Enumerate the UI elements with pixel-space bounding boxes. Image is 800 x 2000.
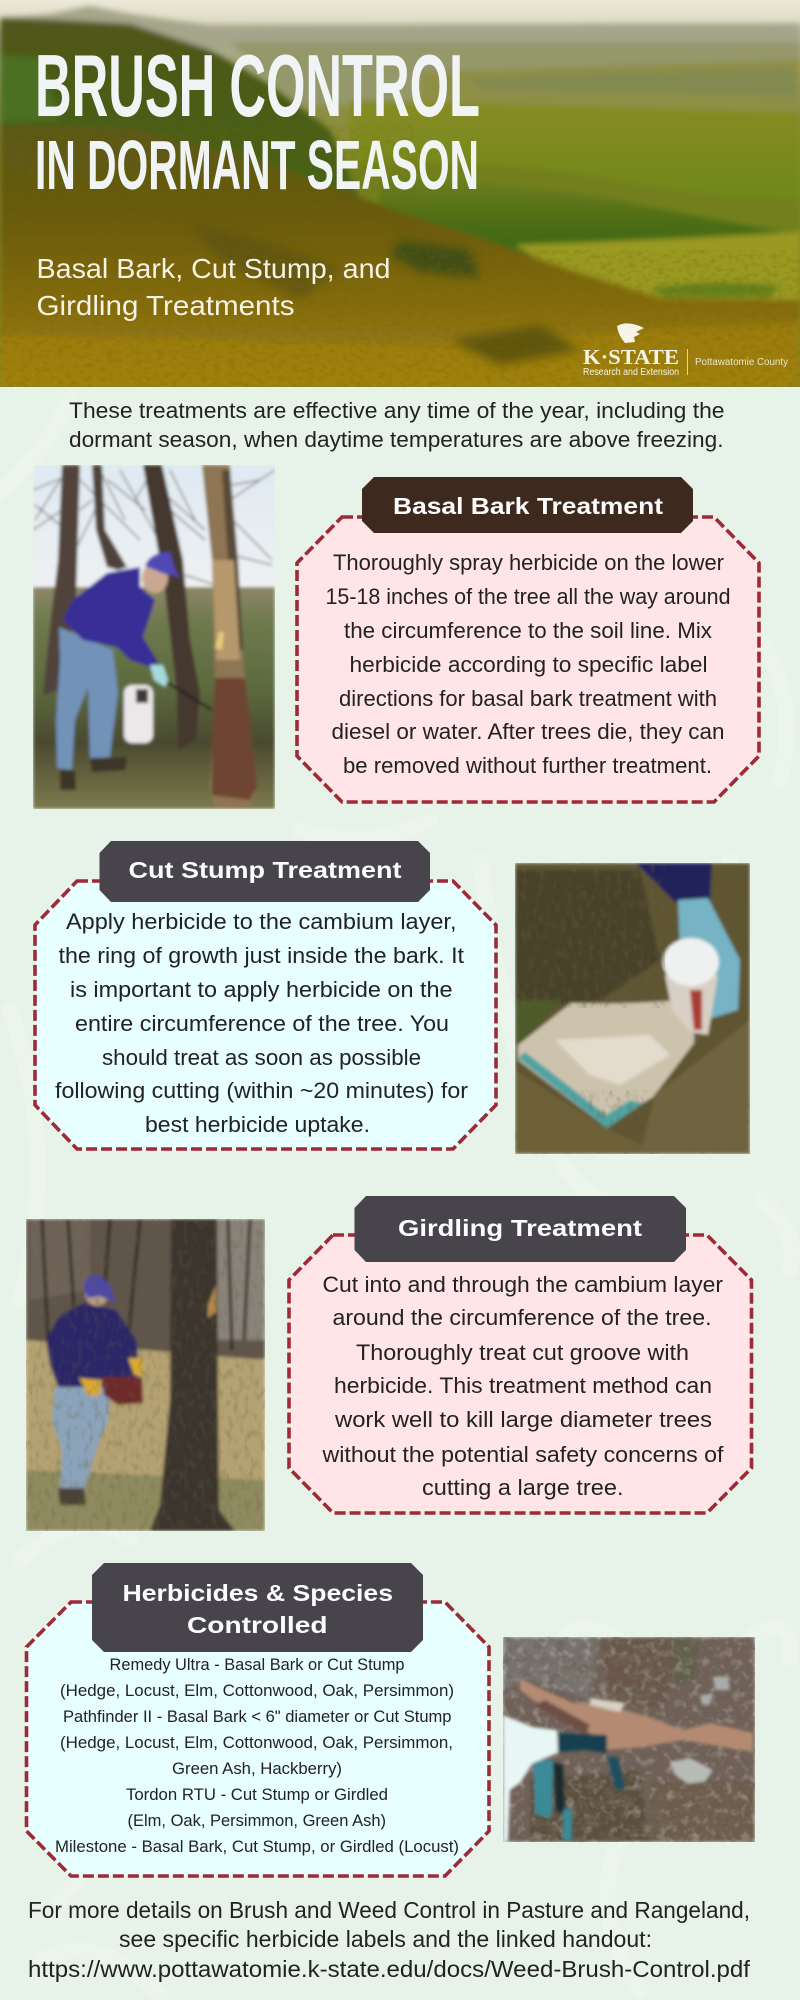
heading: cut stump: Cut Stump Treatment — [128, 857, 402, 883]
basal bark text: directions for basal bark treatment with — [339, 686, 717, 711]
herbicides text: (Elm, Oak, Persimmon, Green Ash) — [128, 1811, 386, 1830]
panel: herbicides and species — [26, 1563, 489, 1876]
herbicides text: Pathfinder II - Basal Bark < 6" diameter or Cut Stump — [63, 1707, 452, 1726]
intro text: dormant season, when daytime temperatures are above freezing. — [69, 427, 724, 452]
cut stump text: entire circumference of the tree. You — [75, 1011, 449, 1036]
heading: girdling — [354, 1196, 686, 1262]
panel: basal bark — [297, 477, 759, 802]
subtitle: Basal Bark, Cut Stump, and — [36, 253, 390, 284]
basal bark text: Thoroughly spray herbicide on the lower — [333, 550, 724, 575]
K-State logo — [583, 323, 788, 378]
K-State logo: Research and Extension — [583, 367, 679, 378]
footer text: For more details on Brush and Weed Control in Pasture and Rangeland, — [28, 1897, 750, 1923]
heading: cut stump — [100, 841, 430, 902]
photo: girdling with chainsaw — [26, 1219, 265, 1531]
photo: cut stump treatment — [515, 863, 750, 1154]
girdling text: work well to kill large diameter trees — [334, 1407, 712, 1432]
heading: herbicides and species: Controlled — [187, 1612, 328, 1638]
intro text — [69, 398, 724, 452]
cut stump text: should treat as soon as possible — [102, 1045, 421, 1070]
intro text: These treatments are effective any time of the year, including the — [69, 398, 724, 423]
footer text — [28, 1897, 751, 1982]
K-State logo: Pottawatomie County — [695, 357, 788, 368]
herbicides text — [55, 1655, 459, 1856]
icon: wildcat head — [617, 323, 644, 343]
photo: girdled bark with herbicide — [503, 1637, 755, 1842]
cut stump text — [55, 909, 468, 1137]
herbicides text: (Hedge, Locust, Elm, Cottonwood, Oak, Persimmon) — [60, 1681, 454, 1700]
photo: basal bark spraying — [33, 465, 275, 809]
cut stump text: best herbicide uptake. — [145, 1112, 370, 1137]
K-State logo: K·STATE — [583, 345, 679, 369]
title: BRUSH CONTROL — [35, 36, 480, 135]
basal bark text — [326, 550, 730, 778]
basal bark text: 15-18 inches of the tree all the way around — [326, 584, 730, 609]
herbicides text: Milestone - Basal Bark, Cut Stump, or Girdled (Locust) — [55, 1837, 459, 1856]
herbicides text: Tordon RTU - Cut Stump or Girdled — [126, 1785, 388, 1804]
girdling text: Cut into and through the cambium layer — [322, 1272, 723, 1297]
title: IN DORMANT SEASON — [35, 126, 479, 204]
panel: girdling — [289, 1196, 752, 1513]
heading: basal bark: Basal Bark Treatment — [393, 493, 663, 519]
basal bark text: diesel or water. After trees die, they can — [332, 719, 724, 744]
girdling text — [321, 1272, 724, 1500]
heading: herbicides and species: Herbicides & Species — [122, 1580, 393, 1606]
girdling text: cutting a large tree. — [422, 1475, 624, 1500]
cut stump text: is important to apply herbicide on the — [70, 977, 453, 1002]
girdling text: around the circumference of the tree. — [332, 1305, 712, 1330]
basal bark text: be removed without further treatment. — [343, 753, 712, 778]
subtitle — [36, 253, 390, 321]
herbicides text: Remedy Ultra - Basal Bark or Cut Stump — [110, 1655, 404, 1674]
girdling text: Thoroughly treat cut groove with — [356, 1340, 689, 1365]
heading: herbicides and species — [92, 1563, 423, 1652]
cut stump text: Apply herbicide to the cambium layer, — [66, 909, 456, 934]
footer text: https://www.pottawatomie.k-state.edu/docs/Weed-Brush-Control.pdf — [28, 1956, 751, 1982]
basal bark text: the circumference to the soil line. Mix — [344, 618, 712, 643]
girdling text: herbicide. This treatment method can — [334, 1373, 712, 1398]
panel: cut stump — [35, 841, 496, 1149]
herbicides text: (Hedge, Locust, Elm, Cottonwood, Oak, Persimmon, — [60, 1733, 453, 1752]
basal bark text: herbicide according to specific label — [350, 652, 708, 677]
subtitle: Girdling Treatments — [36, 290, 294, 321]
heading: girdling: Girdling Treatment — [398, 1215, 642, 1241]
cut stump text: the ring of growth just inside the bark. It — [58, 943, 464, 968]
cut stump text: following cutting (within ~20 minutes) for — [55, 1078, 468, 1103]
heading: basal bark — [362, 477, 693, 533]
hero landscape photo — [0, 0, 800, 387]
footer text: see specific herbicide labels and the linked handout: — [119, 1926, 652, 1952]
girdling text: without the potential safety concerns of — [321, 1442, 724, 1467]
herbicides text: Green Ash, Hackberry) — [172, 1759, 342, 1778]
title — [35, 36, 480, 204]
